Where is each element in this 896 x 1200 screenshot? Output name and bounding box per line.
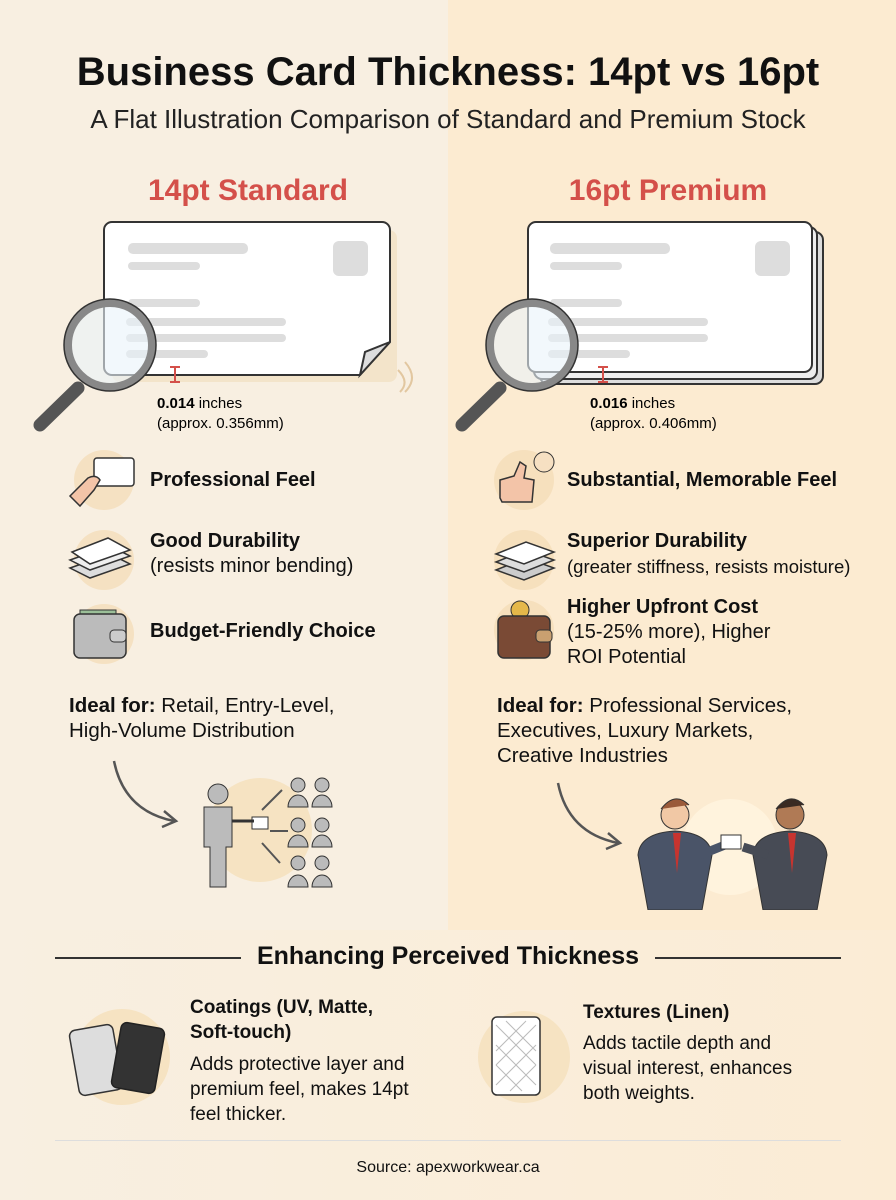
heading: 14pt: 14pt Standard (148, 174, 348, 207)
ideal for: 16pt: Executives, Luxury Markets, (497, 719, 753, 742)
text: coatings: Adds protective layer and premium feel, makes 14pt feel thicker. (190, 1054, 409, 1125)
text: good durability (150, 530, 353, 577)
illustration: 16pt card: (approx. 0.406mm) (590, 415, 717, 432)
text: memorable feel: Substantial, Memorable Feel (567, 469, 837, 491)
text: textures: Adds tactile depth and visual interest, enhances both weights. (583, 1033, 792, 1104)
icon: coatings (68, 1009, 170, 1105)
text: coatings: Soft-touch) (190, 1022, 291, 1043)
icon: card stack (68, 530, 134, 590)
ideal for: 14pt (69, 694, 334, 742)
text: textures: Textures (Linen) (583, 1002, 729, 1023)
text: textures (583, 1002, 792, 1104)
text: professional feel: Professional Feel (150, 469, 316, 491)
section heading: enhancing: Enhancing Perceived Thickness (257, 942, 639, 970)
illustration: 14pt card: (approx. 0.356mm) (157, 415, 284, 432)
ideal for: 14pt: Ideal for: Retail, Entry-Level, (69, 694, 334, 717)
features: 14pt (68, 450, 376, 664)
text: good durability: Good Durability (150, 530, 300, 552)
source: Source: apexworkwear.ca (356, 1159, 540, 1176)
text: higher cost: (15-25% more), Higher (567, 621, 770, 643)
heading: 16pt: 16pt Premium (569, 174, 767, 207)
text: higher cost: ROI Potential (567, 646, 686, 668)
ideal for: 16pt: Creative Industries (497, 744, 668, 767)
illustration: 14pt card (34, 221, 413, 432)
ideal for: 14pt: High-Volume Distribution (69, 719, 295, 742)
subtitle: A Flat Illustration Comparison of Standard and Premium Stock (90, 104, 806, 134)
text: good durability: (resists minor bending) (150, 555, 353, 577)
text: budget friendly: Budget-Friendly Choice (150, 620, 376, 642)
text: coatings: Coatings (UV, Matte, (190, 997, 373, 1018)
ideal for: 16pt: Ideal for: Professional Services, (497, 694, 792, 717)
illustration: 16pt card: 0.016 inches (590, 395, 675, 412)
icon: linen texture (478, 1011, 570, 1103)
illustration: distribution (112, 760, 332, 888)
text: superior durability (567, 530, 850, 577)
text: superior durability: Superior Durability (567, 530, 747, 552)
features: 16pt (494, 450, 850, 668)
ideal for: 16pt (497, 694, 792, 767)
icon: thick stack (494, 530, 556, 590)
icon: brown wallet (494, 600, 554, 660)
title: Business Card Thickness: 14pt vs 16pt (77, 50, 819, 94)
text: coatings (190, 997, 409, 1125)
illustration: 16pt card (456, 221, 824, 432)
text: superior durability: (greater stiffness, resists moisture) (567, 556, 850, 577)
icon: wallet grey (73, 604, 134, 664)
icon: thumbs up (494, 450, 554, 510)
illustration: handshake exchange (556, 782, 828, 910)
text: higher cost (567, 596, 770, 668)
icon: hand with card (69, 450, 135, 510)
text: higher cost: Higher Upfront Cost (567, 596, 758, 618)
illustration: 14pt card: 0.014 inches (157, 395, 242, 412)
